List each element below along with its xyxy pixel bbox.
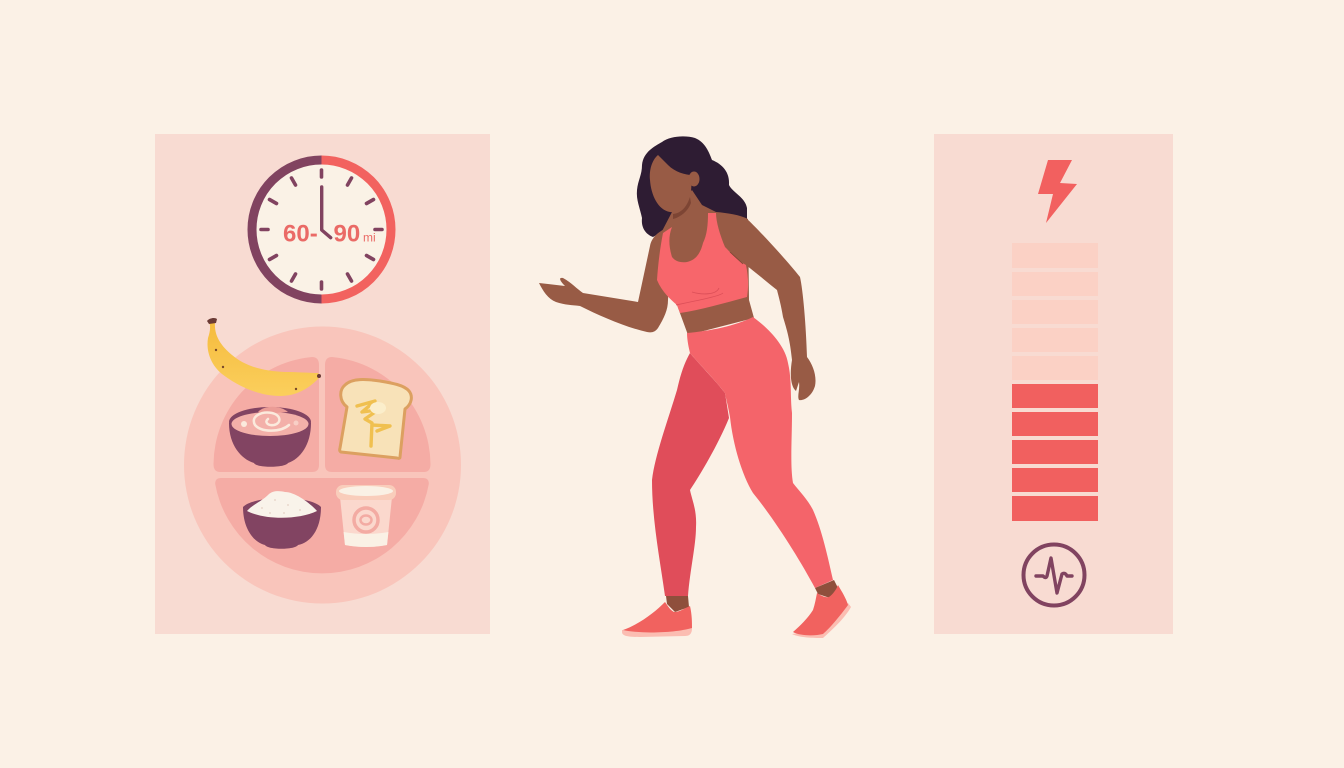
shoe: back [792, 603, 851, 638]
shoe: front [622, 628, 692, 637]
banana [207, 318, 321, 396]
panel: energy level [934, 134, 1173, 634]
torso and neck [657, 190, 754, 335]
leg: back and hips [687, 317, 833, 588]
plate with four food sections [184, 318, 461, 604]
sports bra [657, 213, 748, 313]
leg: front, shaded [652, 353, 729, 596]
arm: reaching forward [539, 226, 672, 332]
energy bar meter [1012, 243, 1098, 521]
toast with honey [340, 380, 411, 458]
ear [688, 172, 700, 186]
icon: clock 60-90 min: mi [363, 230, 376, 244]
icon: clock 60-90 min: 90 [334, 220, 360, 248]
plate sections [214, 357, 430, 573]
ankle: front [666, 596, 689, 612]
icon: lightning bolt [1038, 160, 1077, 223]
arm: back [715, 213, 816, 400]
panel: meal timing [155, 134, 490, 634]
hair [637, 136, 747, 237]
bowl of oatmeal [229, 407, 311, 467]
icon: heartbeat pulse [1024, 544, 1084, 606]
ankle: back [815, 580, 839, 598]
clock label: 60- [283, 220, 318, 248]
face [650, 155, 692, 212]
bowl of rice [243, 491, 321, 549]
yogurt cup [336, 485, 396, 547]
icon: clock 60-90 min [252, 160, 391, 299]
figure: woman walking in athletic wear [539, 136, 851, 638]
